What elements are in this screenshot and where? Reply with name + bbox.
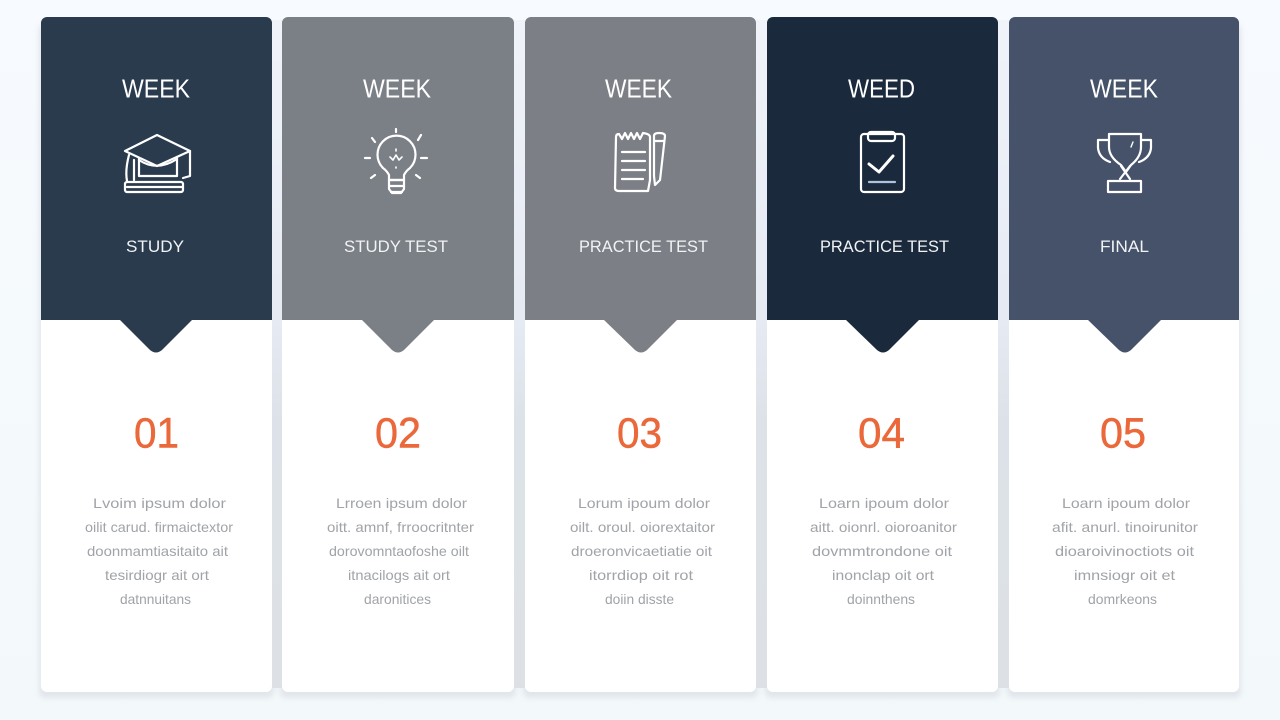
body text: week 5: Loarn ipoum dolor bbox=[1062, 495, 1190, 511]
header band: week 4 bbox=[767, 17, 998, 352]
body text: week 2: daronitices bbox=[364, 591, 431, 607]
body text: week 4: dovmmtrondone oit bbox=[812, 543, 952, 559]
body text: week 1 bbox=[85, 495, 233, 607]
label: final: FINAL bbox=[1100, 237, 1149, 256]
body text: week 2: itnacilogs ait ort bbox=[348, 567, 450, 583]
body text: week 4: Loarn ipoum dolor bbox=[819, 495, 949, 511]
header band: week 5 bbox=[1009, 17, 1239, 352]
panel: week 3 card bbox=[525, 17, 756, 692]
header band: week 2 bbox=[282, 17, 514, 352]
body text: week 5: dioaroivinoctiots oit bbox=[1055, 543, 1194, 559]
body text: week 2: Lrroen ipsum dolor bbox=[336, 495, 467, 511]
icon: light bulb bbox=[365, 129, 427, 193]
body text: week 5 bbox=[1052, 495, 1198, 607]
icon: trophy bbox=[1098, 134, 1151, 192]
icon: clipboard with check bbox=[861, 132, 904, 192]
body text: week 4 bbox=[810, 495, 957, 607]
number: 03: 03 bbox=[617, 410, 662, 458]
icon: graduation cap on books bbox=[125, 135, 190, 192]
panel: week 2 card bbox=[282, 17, 514, 692]
body text: week 1: Lvoim ipsum dolor bbox=[93, 495, 226, 511]
body text: week 5: domrkeons bbox=[1088, 591, 1157, 607]
body text: week 3: itorrdiop oit rot bbox=[589, 567, 693, 583]
body text: week 1: doonmamtiasitaito ait bbox=[87, 543, 228, 559]
heading: week 2: WEEK bbox=[363, 74, 432, 104]
body text: week 3 bbox=[570, 495, 715, 607]
panel: week 1 card bbox=[41, 17, 272, 692]
body text: week 2 bbox=[327, 495, 474, 607]
body text: week 2: dorovomntaofoshe oilt bbox=[329, 543, 469, 559]
body text: week 5: imnsiogr oit et bbox=[1074, 567, 1175, 583]
heading: week 1: WEEK bbox=[122, 74, 191, 104]
body text: week 4: aitt. oionrl. oioroanitor bbox=[810, 519, 957, 535]
label: study test: STUDY TEST bbox=[344, 237, 448, 256]
body text: week 2: oitt. amnf, frroocritnter bbox=[327, 519, 474, 535]
icon: notepad and pencil bbox=[615, 133, 665, 191]
heading: week 4: WEED bbox=[848, 74, 915, 104]
body text: week 3: droeronvicaetiatie oit bbox=[571, 543, 712, 559]
label: practice test: PRACTICE TEST bbox=[579, 237, 708, 256]
number: 01: 01 bbox=[134, 410, 179, 458]
heading: week 3: WEEK bbox=[605, 74, 673, 104]
number: 04: 04 bbox=[858, 410, 905, 458]
heading: week 5: WEEK bbox=[1090, 74, 1159, 104]
label: study: STUDY bbox=[126, 237, 184, 256]
label: practice test: PRACTICE TEST bbox=[820, 237, 949, 256]
body text: week 5: afit. anurl. tinoirunitor bbox=[1052, 519, 1198, 535]
body text: week 3: Lorum ipoum dolor bbox=[578, 495, 710, 511]
body text: week 1: datnnuitans bbox=[120, 591, 191, 607]
body text: week 1: oilit carud. firmaictextor bbox=[85, 519, 233, 535]
body text: week 4: doinnthens bbox=[847, 591, 915, 607]
body text: week 4: inonclap oit ort bbox=[832, 567, 934, 583]
header band: week 3 bbox=[525, 17, 756, 352]
panel: week 5 card bbox=[1009, 17, 1239, 692]
number: 02: 02 bbox=[375, 410, 421, 458]
panel: week 4 card bbox=[767, 17, 998, 692]
number: 05: 05 bbox=[1100, 410, 1146, 458]
body text: week 3: doiin disste bbox=[605, 591, 674, 607]
header band: week 1 bbox=[41, 17, 272, 352]
body text: week 3: oilt. oroul. oiorextaitor bbox=[570, 519, 715, 535]
body text: week 1: tesirdiogr ait ort bbox=[105, 567, 209, 583]
